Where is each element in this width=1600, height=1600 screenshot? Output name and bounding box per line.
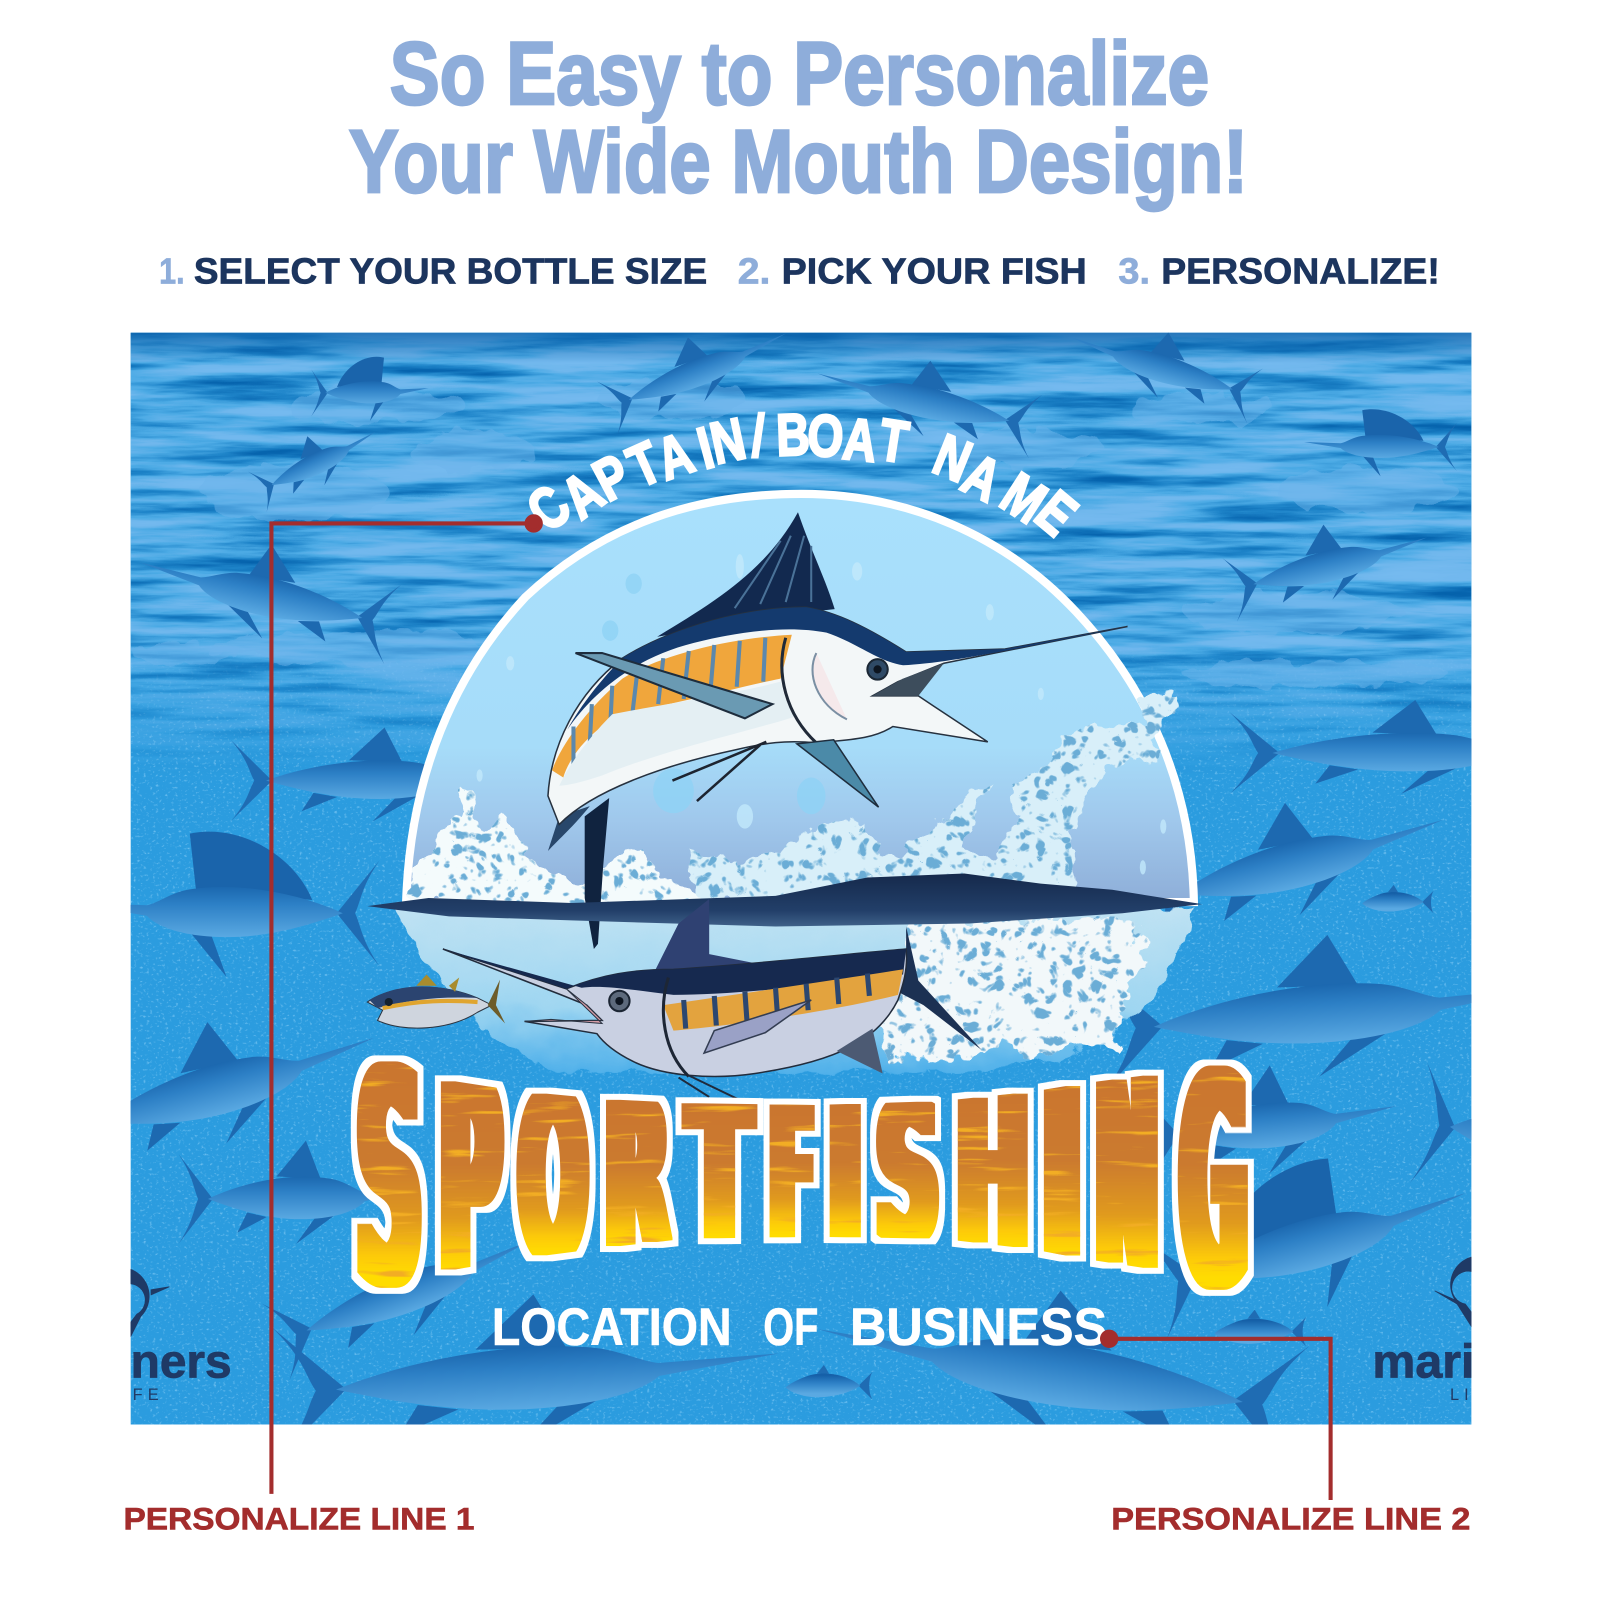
- wordmark: sportfishing: R: [605, 1057, 669, 1299]
- water droplets: [477, 554, 1166, 874]
- water surface line: [367, 873, 1202, 927]
- curved text: captain / boat name: P: [583, 442, 641, 514]
- steps line: 1.: [159, 252, 185, 292]
- callout: personalize line 2 leader: [1102, 1332, 1331, 1500]
- logo: right wrap-around mariners: LI: [1450, 1386, 1474, 1404]
- foam patches: [133, 378, 1459, 686]
- rippled upper water texture: [130, 332, 1472, 756]
- dark band along top edge: [130, 332, 1472, 360]
- curved text: captain / boat name: C: [515, 473, 584, 544]
- curved text: captain / boat name: B: [775, 402, 811, 469]
- label: personalize line 2: PERSONALIZE LINE 2: [1111, 1501, 1470, 1537]
- wordmark: sportfishing: N: [1096, 1017, 1158, 1338]
- icon: tuna: [367, 974, 505, 1028]
- steps line: PERSONALIZE!: [1161, 252, 1440, 292]
- wordmark: sportfishing: [350, 1055, 1254, 1296]
- callout: personalize line 1 leader: [271, 516, 541, 1494]
- location text: OF: [763, 1298, 818, 1357]
- panel: bottle wrap artwork: [130, 332, 1472, 1424]
- logo: right wrap-around mariners: mari: [1372, 1336, 1474, 1388]
- speckled lower water texture: [131, 664, 1472, 1424]
- curved text: captain / boat name: [529, 412, 1081, 539]
- curved text: captain / boat name: A: [840, 406, 880, 475]
- label: personalize line 1: PERSONALIZE LINE 1: [123, 1501, 474, 1537]
- dome sky: [406, 494, 1194, 902]
- curved text: captain / boat name: A: [649, 420, 702, 493]
- steps line: SELECT YOUR BOTTLE SIZE: [194, 252, 707, 292]
- icon: underwater marlin: [443, 899, 982, 1100]
- wordmark: sportfishing: G: [1181, 1012, 1247, 1354]
- steps line: PICK YOUR FISH: [782, 252, 1087, 292]
- logo: right wrap-around mariners: [1372, 1257, 1474, 1404]
- lower splash: [878, 918, 1153, 1061]
- wordmark: sportfishing: P: [440, 1024, 501, 1339]
- location text: BUSINESS: [850, 1298, 1107, 1357]
- curved text: captain / boat name: O: [806, 403, 845, 470]
- steps line: 2.: [738, 252, 770, 292]
- curved text: captain / boat name: I: [691, 415, 720, 482]
- icon: jumping marlin: [548, 512, 1128, 949]
- logo: left wrap-around mariners: FE: [133, 1386, 164, 1404]
- steps line: 3.: [1118, 252, 1150, 292]
- left water splash: [406, 786, 700, 903]
- underwater glow: [393, 906, 1194, 1071]
- wordmark: sportfishing: I: [1040, 1034, 1084, 1319]
- right water splash: [689, 694, 1176, 903]
- curved text: captain / boat name: M: [989, 460, 1057, 537]
- curved text: captain / boat name: T: [875, 407, 913, 476]
- wordmark: sportfishing: F: [771, 1067, 813, 1283]
- title: [349, 24, 1248, 211]
- title: Your Wide Mouth Design!: [349, 112, 1248, 211]
- wordmark: sportfishing: O: [519, 1044, 587, 1313]
- wordmark: sportfishing: T: [688, 1064, 751, 1287]
- location text: LOCATION: [492, 1298, 732, 1357]
- curved text: captain / boat name: A: [550, 459, 616, 532]
- logo: left wrap-around mariners: ners: [131, 1336, 232, 1388]
- curved text: captain / boat name: A: [952, 441, 1011, 515]
- curved text: captain / boat name: N: [925, 422, 980, 496]
- curved text: captain / boat name: E: [1023, 479, 1089, 549]
- curved text: captain / boat name: /: [752, 404, 765, 470]
- curved text: captain / boat name: N: [705, 406, 751, 477]
- wordmark: sportfishing: S: [357, 1008, 421, 1353]
- curved text: captain / boat name: T: [618, 429, 671, 501]
- logo: left wrap-around mariners: [131, 1269, 232, 1404]
- wordmark: sportfishing: H: [957, 1045, 1029, 1304]
- wordmark: sportfishing: S: [877, 1064, 938, 1287]
- wordmark: sportfishing: I: [828, 1066, 862, 1283]
- location text: [494, 1308, 1105, 1346]
- title: So Easy to Personalize: [390, 24, 1209, 123]
- steps line: [159, 252, 1440, 292]
- background fish school: [130, 332, 1472, 1424]
